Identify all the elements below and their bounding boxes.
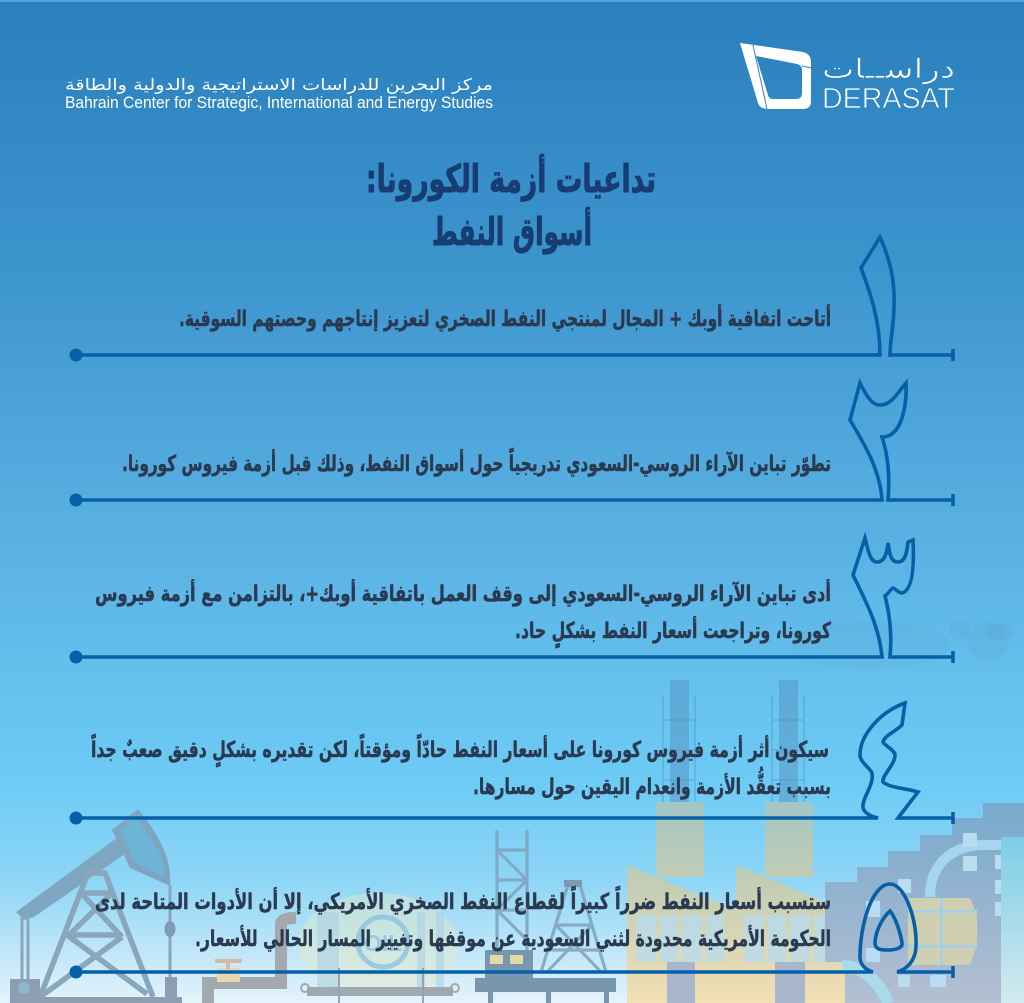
background art: oil tank [298, 893, 459, 1003]
dot [70, 650, 82, 664]
logo: Derasat [740, 43, 955, 115]
background art: faint clouds [790, 620, 1014, 669]
numeral 1 and rule [76, 237, 953, 361]
title: أسواق النفط [432, 207, 592, 254]
item 2 [70, 383, 953, 506]
background art: factory [627, 680, 845, 1003]
item 4 [70, 703, 953, 824]
header: organisation name: Bahrain Center for Strategic, International and Energy Studies [65, 93, 493, 112]
numeral 5 and rule [76, 884, 953, 978]
logo: Derasat: دراســات [822, 54, 955, 85]
item 3 [70, 538, 953, 664]
background art: oil rig [475, 830, 616, 1003]
header: organisation name: مركز البحرين للدراسات الاستراتيجية والدولية والطاقة [65, 75, 493, 95]
header: organisation name [65, 75, 493, 112]
numeral 4 and rule [76, 703, 953, 824]
title [366, 154, 656, 254]
item 1 [70, 237, 953, 362]
icon: logo mark [740, 43, 811, 109]
dot [70, 494, 82, 506]
title: تداعيات أزمة الكورونا: [366, 154, 656, 202]
dot [70, 966, 82, 978]
numeral 3 and rule [76, 538, 953, 663]
dot [70, 348, 82, 362]
item 3: كورونا، وتراجعت أسعار النفط بشكلٍ حاد. [515, 615, 831, 649]
background art: oil pumpjack [10, 809, 182, 1003]
item 5 [70, 884, 953, 978]
numeral 2 and rule [76, 383, 953, 506]
background art: stepped refinery blocks [825, 803, 1024, 1003]
item 4: بسبب تعقُّد الأزمة وانعدام اليقين حول مسارها. [473, 766, 831, 800]
logo: Derasat: DERASAT [822, 83, 955, 115]
background art: pipes and valve [208, 918, 296, 1003]
background art: oil tank: OIL [364, 930, 402, 956]
dot [70, 812, 82, 824]
